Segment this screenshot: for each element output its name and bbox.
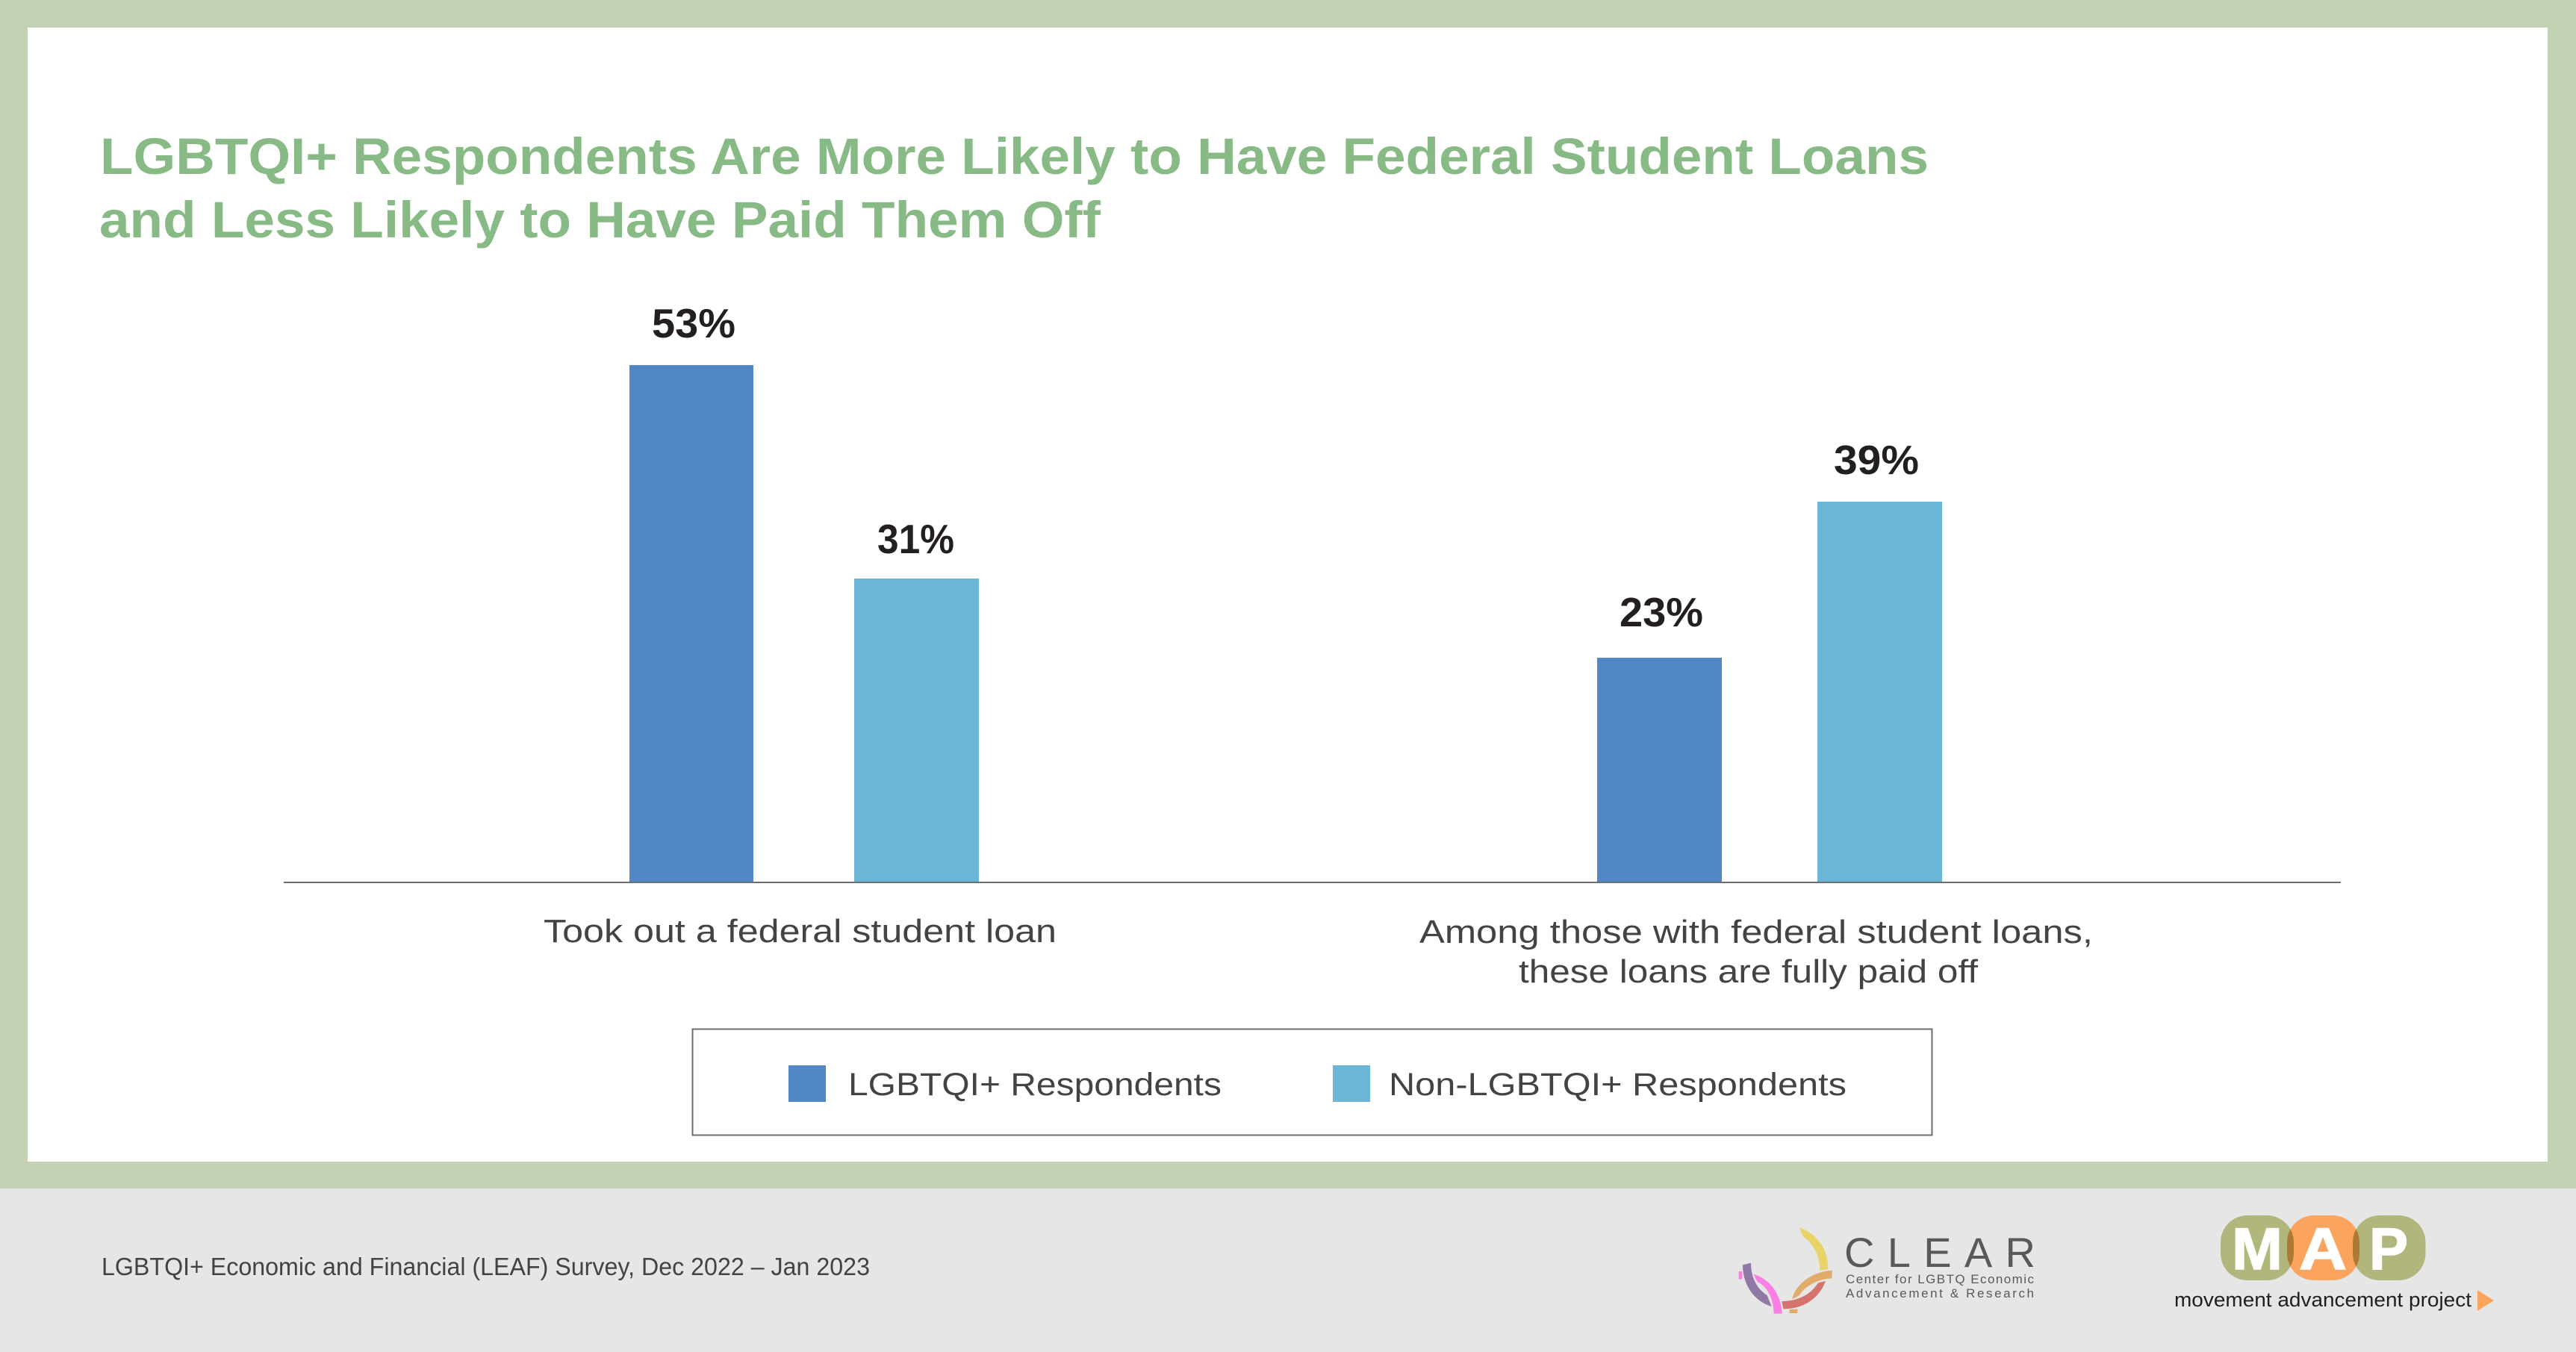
icon: MAP orange arrow	[2477, 1290, 2494, 1311]
MAP overlap left	[2287, 1229, 2294, 1266]
legend	[693, 1029, 1932, 1135]
MAP letters: A	[2299, 1215, 2347, 1282]
CLEAR subtitle: Advancement & Research	[1846, 1286, 2034, 1300]
legend swatch: LGBTQI+	[788, 1065, 826, 1102]
bar: paid off, LGBTQI+ 23%	[1597, 658, 1722, 882]
chart axis	[284, 882, 2341, 883]
title: and Less Likely to Have Paid Them Off	[99, 191, 1101, 249]
legend swatch: Non-LGBTQI+	[1333, 1065, 1370, 1102]
value label 39%: 39%	[1834, 437, 1919, 483]
value label 23%: 23%	[1620, 589, 1703, 635]
title	[99, 128, 1929, 249]
MAP letters	[2232, 1215, 2408, 1282]
bar: took out loan, Non-LGBTQI+ 31%	[854, 579, 979, 882]
legend label: Non-LGBTQI+: Non-LGBTQI+ Respondents	[1389, 1067, 1847, 1103]
category label: fully paid off	[1419, 914, 2093, 990]
bar: paid off, Non-LGBTQI+ 39%	[1817, 502, 1942, 882]
category label: fully paid off: Among those with federal student loans,	[1419, 914, 2093, 950]
logo: CLEAR	[1739, 1227, 2035, 1314]
title: LGBTQI+ Respondents Are More Likely to Have Federal Student Loans	[100, 128, 1929, 185]
MAP pill A	[2287, 1215, 2359, 1280]
value label 31%: 31%	[877, 516, 954, 562]
bar: took out loan, LGBTQI+ 53%	[629, 365, 753, 882]
CLEAR subtitle: Center for LGBTQ Economic	[1846, 1272, 2034, 1286]
MAP letters: P	[2369, 1215, 2408, 1282]
logo: MAP	[2174, 1215, 2494, 1311]
bar chart	[284, 300, 2341, 990]
icon: CLEAR ribbon mark	[1739, 1227, 1832, 1314]
MAP overlap right	[2353, 1229, 2359, 1266]
MAP pill P	[2353, 1215, 2425, 1280]
MAP letters: M	[2232, 1215, 2283, 1282]
CLEAR wordmark: CLEAR	[1844, 1229, 2035, 1276]
panel: grey footer band	[0, 1189, 2576, 1352]
legend label: LGBTQI+: LGBTQI+ Respondents	[848, 1067, 1222, 1103]
category label: fully paid off: these loans are fully paid off	[1519, 953, 1979, 990]
MAP pill M	[2221, 1215, 2294, 1280]
source note: LGBTQI+ Economic and Financial (LEAF) Survey, Dec 2022 – Jan 2023	[102, 1253, 870, 1280]
legend frame	[693, 1029, 1932, 1135]
CLEAR subtitle	[1846, 1272, 2034, 1300]
category label: took out a federal student loan: Took out a federal student loan	[544, 913, 1057, 950]
MAP tagline: movement advancement project	[2174, 1289, 2472, 1311]
value label 53%: 53%	[652, 300, 735, 346]
